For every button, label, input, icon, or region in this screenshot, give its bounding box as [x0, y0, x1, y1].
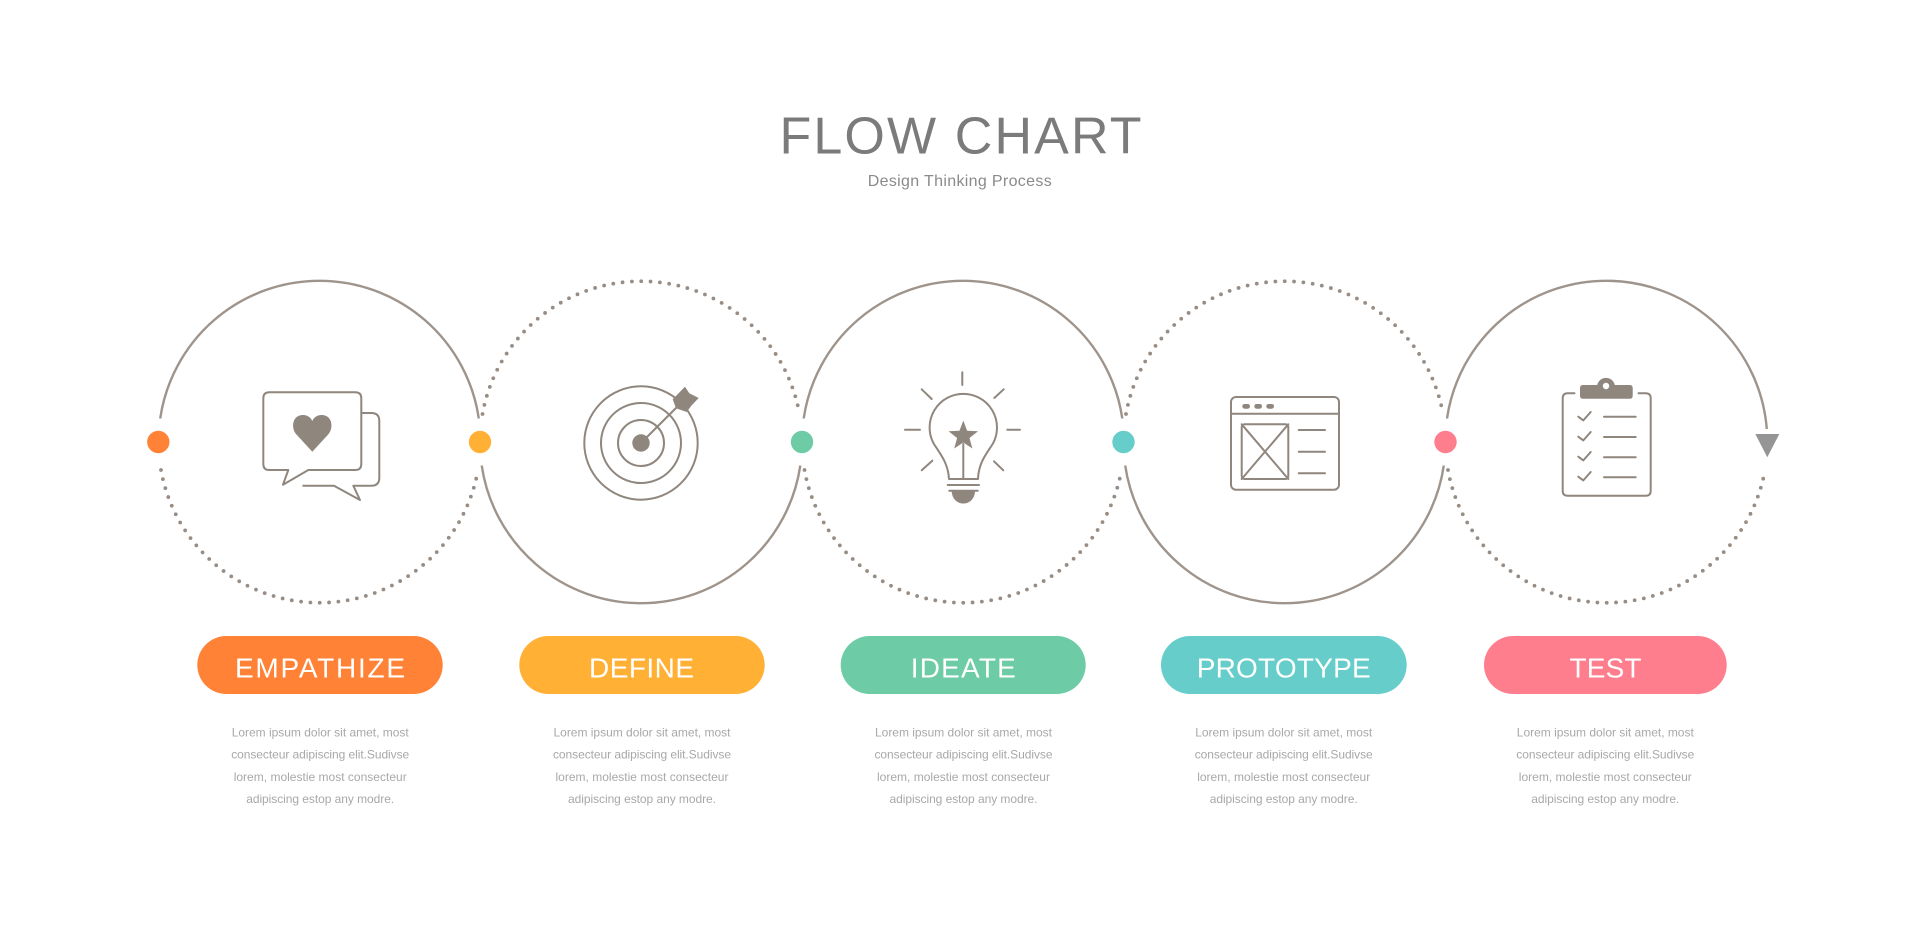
text block: ideate description: consecteur adipiscing elit.Sudivse: [874, 748, 1053, 762]
node: orange dot: [147, 431, 170, 453]
node: green dot: [791, 431, 813, 453]
text block: test description: Lorem ipsum dolor sit amet, most: [1517, 726, 1694, 740]
dotted arc: empathize bottom: [161, 470, 478, 603]
icon: target with arrow: [584, 386, 699, 500]
label pill: ideate: [841, 636, 1086, 694]
icon: light bulb with star: [905, 372, 1020, 504]
label pill: define: [519, 636, 765, 694]
label pill: empathize: EMPATHIZE: [235, 653, 405, 684]
text block: define description: adipiscing estop any modre.: [568, 792, 716, 806]
text block: empathize description: lorem, molestie most consecteur: [234, 770, 407, 784]
solid arc: define bottom: [482, 466, 800, 603]
text block: prototype description: lorem, molestie most consecteur: [1197, 770, 1370, 784]
text block: empathize description: adipiscing estop any modre.: [246, 792, 394, 806]
text block: ideate description: Lorem ipsum dolor sit amet, most: [875, 726, 1053, 740]
label pill: empathize: [197, 636, 443, 694]
icon: browser wireframe: [1231, 397, 1339, 490]
solid arc: empathize top: [160, 281, 479, 418]
text block: empathize description: consecteur adipiscing elit.Sudivse: [231, 748, 410, 762]
icon: clipboard checklist: [1563, 378, 1651, 496]
text block: test description: consecteur adipiscing elit.Sudivse: [1516, 748, 1695, 762]
text block: prototype description: Lorem ipsum dolor sit amet, most: [1195, 726, 1373, 740]
label pill: ideate: IDEATE: [911, 653, 1016, 684]
solid arc: test top: [1447, 281, 1767, 429]
solid arc: prototype bottom: [1125, 466, 1444, 603]
text block: prototype description: consecteur adipiscing elit.Sudivse: [1195, 748, 1373, 762]
label pill: define: DEFINE: [589, 653, 694, 684]
dotted arc: ideate bottom: [804, 470, 1122, 603]
solid arc: ideate top: [804, 281, 1122, 418]
title: FLOW CHART: [780, 108, 1142, 166]
panel: test step: [1434, 281, 1779, 806]
label pill: prototype: PROTOTYPE: [1197, 653, 1371, 684]
text block: define description: [553, 726, 731, 806]
text block: ideate description: lorem, molestie most consecteur: [877, 770, 1050, 784]
node: pink dot: [1434, 431, 1457, 453]
label pill: test: [1484, 636, 1727, 694]
icon: chat bubbles with heart: [263, 392, 379, 500]
text block: test description: adipiscing estop any modre.: [1531, 792, 1679, 806]
panel: prototype step: [1112, 281, 1444, 806]
node: teal dot: [1112, 431, 1135, 453]
subtitle: Design Thinking Process: [868, 173, 1052, 190]
panel: empathize step: [147, 281, 479, 806]
text block: define description: consecteur adipiscing elit.Sudivse: [553, 748, 731, 762]
text block: ideate description: adipiscing estop any modre.: [890, 792, 1038, 806]
dotted arc: test bottom: [1448, 470, 1765, 603]
arrow: end of flow: [1755, 434, 1779, 457]
text block: empathize description: [231, 726, 410, 806]
panel: define step: [469, 281, 800, 806]
label pill: prototype: [1161, 636, 1407, 694]
text block: define description: lorem, molestie most consecteur: [556, 770, 728, 784]
dotted arc: define top: [482, 281, 800, 414]
text block: prototype description: adipiscing estop any modre.: [1210, 792, 1358, 806]
text block: test description: [1516, 726, 1695, 806]
text block: empathize description: Lorem ipsum dolor sit amet, most: [232, 726, 409, 740]
text block: prototype description: [1195, 726, 1373, 806]
label pill: test: TEST: [1570, 653, 1642, 684]
text block: define description: Lorem ipsum dolor sit amet, most: [554, 726, 731, 740]
panel: ideate step: [791, 281, 1122, 806]
node: yellow dot: [469, 431, 491, 453]
text block: ideate description: [874, 726, 1053, 806]
dotted arc: prototype top: [1126, 281, 1443, 414]
text block: test description: lorem, molestie most consecteur: [1519, 770, 1692, 784]
